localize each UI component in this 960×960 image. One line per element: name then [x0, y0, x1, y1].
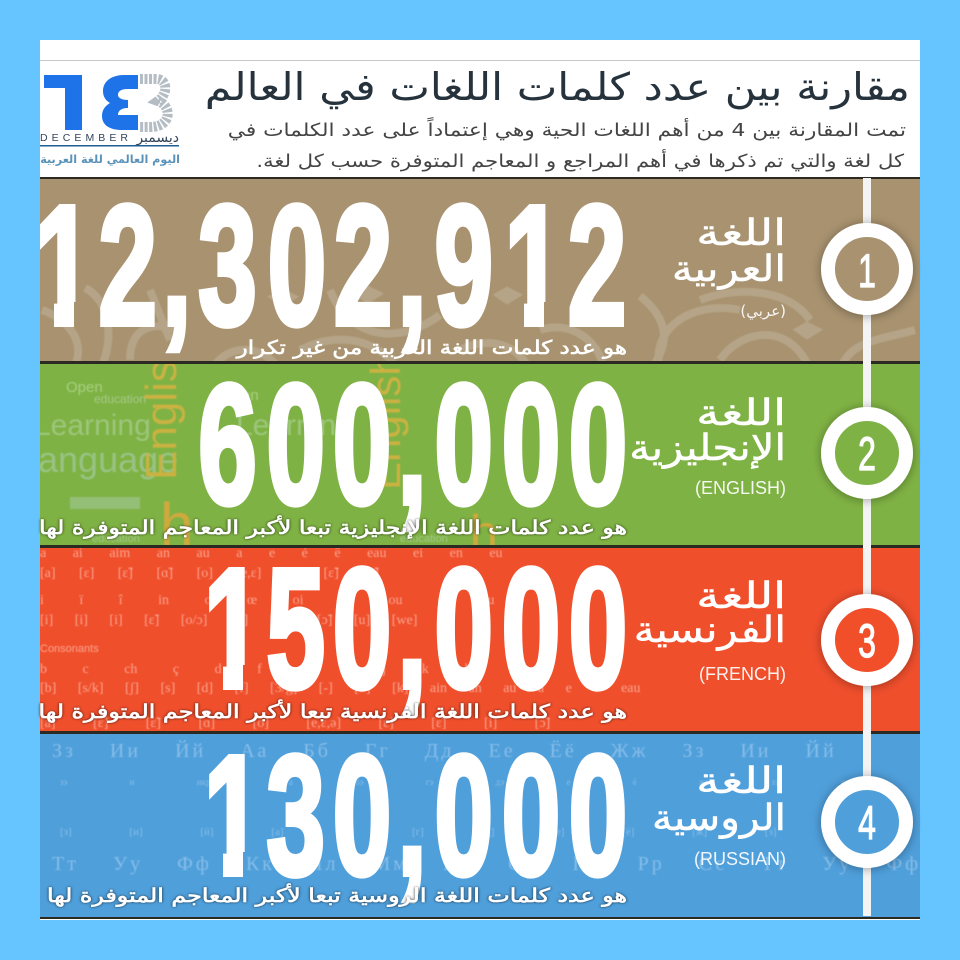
step 2: 2 [858, 428, 876, 481]
header [40, 60, 920, 172]
title: مقارنة بين عدد كلمات اللغات في العالم [205, 64, 910, 109]
background: French phonetics table: Consonants [40, 643, 99, 655]
language name: English [629, 391, 786, 469]
background: Cyrillic alphabet: зэ и икрэткэ а бэ гэ дэ е ё жэ зэ и [60, 777, 846, 787]
background: English word cloud: Open [66, 379, 103, 396]
background: French phonetics table [40, 546, 641, 731]
logo: 18 December: ديسمبر [135, 130, 179, 146]
step 3: 3 [858, 615, 876, 668]
language tag: English: (ENGLISH) [695, 478, 786, 498]
language name: Russian [652, 759, 786, 839]
language name: Russian: اللغة [696, 759, 786, 802]
background: English word cloud: Learning [236, 409, 353, 442]
step 3 [828, 601, 906, 679]
number: 150,000: 150,000 [204, 533, 627, 723]
number: 12,302,912: 12,302,912 [35, 170, 626, 360]
background: English word cloud: h [160, 491, 193, 558]
background: French phonetics table: a ai aim an au a e é ê eau ei en eu [40, 546, 503, 561]
intro text: كل لغة والتي تم ذكرها في أهم المراجع و المعاجم المتوفرة حسب كل لغة. [256, 149, 905, 172]
background: Cyrillic alphabet [52, 739, 921, 875]
number: 600,000: 600,000 [198, 349, 627, 539]
logo: 18 December: اليوم العالمي للغة العربية [40, 153, 180, 166]
caption: French count: هو عدد كلمات اللغة الفرنسية تبعا لأكبر المعاجم المتوفرة لها [39, 699, 627, 723]
background: English word cloud: education [94, 392, 146, 406]
panel: Russian [40, 720, 921, 918]
language name: Arabic: العربية [672, 249, 786, 290]
logo: 18 December: DECEMBER [40, 132, 128, 144]
language name: French [634, 574, 786, 651]
background: English word cloud: English [362, 352, 409, 490]
background: English word cloud: h [470, 505, 498, 561]
background: French phonetics table: b c ch ç d f g h j k l [40, 662, 468, 677]
background: French phonetics table: i ï î in o œ oi on ou oy u [40, 593, 495, 608]
panel: French [39, 533, 920, 732]
background: English word cloud: education [92, 533, 140, 545]
background: Cyrillic alphabet: [з] [и] [й] [а] [б] [г] [д] [е] [ё] [ж] [з] [60, 826, 777, 838]
panel: English [38, 364, 920, 545]
step 1 [828, 230, 906, 308]
panel: Arabic [40, 179, 920, 361]
language tag: French: (FRENCH) [699, 664, 786, 684]
caption: English count: هو عدد كلمات اللغة الإنجليزية تبعا لأكبر المعاجم المتوفرة لها [39, 515, 627, 539]
background: English word cloud: language [30, 439, 178, 480]
language name: English: الإنجليزية [629, 428, 786, 469]
background: French phonetics table: [b] [s/k] [ʃ] [s] [d] [f] [3/g] [-] [3] [k] ain an au a e é eau [40, 681, 641, 696]
background: Cyrillic alphabet: Тт Уу Фф Кк Лл Мм Нн Оо Пп Рр Сс Тт Уу Фф [52, 853, 921, 875]
background: French phonetics table: [a] [ɛ] [ɛ̃] [ɑ̃] [o] [e,ɛ] [ɛ] [ɛ̃] [ɑ̃] [40, 566, 379, 581]
background: English word cloud: English [137, 336, 186, 480]
language name: Arabic [672, 211, 786, 290]
language name: French: الفرنسية [634, 610, 786, 651]
step 4: 4 [858, 797, 876, 850]
caption: Russian count: هو عدد كلمات اللغة الروسية تبعا لأكبر المعاجم المتوفرة لها [47, 883, 627, 907]
step 4 [828, 783, 906, 861]
intro text: تمت المقارنة بين 4 من أهم اللغات الحية وهي إعتماداً على عدد الكلمات في [228, 117, 906, 141]
number: 130,000: 130,000 [204, 720, 627, 910]
language name: French: اللغة [696, 574, 786, 617]
background: Arabic calligraphy pattern [40, 284, 916, 361]
background: English word cloud: Open [222, 387, 259, 404]
background: English word cloud: Learning [34, 409, 151, 442]
language name: English: اللغة [696, 391, 786, 434]
language tag: Arabic: (عربي) [740, 302, 786, 321]
caption: Arabic count: هو عدد كلمات اللغة العربية من غير تكرار [235, 336, 627, 358]
step 1: 1 [858, 245, 876, 298]
background: English word cloud [40, 364, 496, 545]
background: Cyrillic alphabet: Зз Ии Йй Аа Бб Гг Дд Ее Ёё Жж Зз Ии Йй [52, 739, 837, 762]
logo: 18 December [40, 75, 180, 166]
background: English word cloud: education [400, 533, 448, 545]
background: French phonetics table: [a] [ɛ] [ɛ̃] [ɑ̃] [o] [e,ɛ,ə] [ɛ] [ɛ̃] [i] [ɔ̃] [40, 716, 551, 731]
language name: Russian: الروسية [652, 797, 786, 839]
intro text [228, 117, 906, 172]
language name: Arabic: اللغة [696, 211, 786, 254]
step 2 [828, 414, 906, 492]
language tag: Russian: (RUSSIAN) [694, 849, 786, 869]
background: French phonetics table: [i] [i] [i] [ɛ̃] [o/ɔ] [œ] [wa] [ɔ̃] [u] [we] [y] [40, 613, 455, 628]
panel dividers [40, 177, 920, 919]
timeline line [863, 178, 871, 916]
